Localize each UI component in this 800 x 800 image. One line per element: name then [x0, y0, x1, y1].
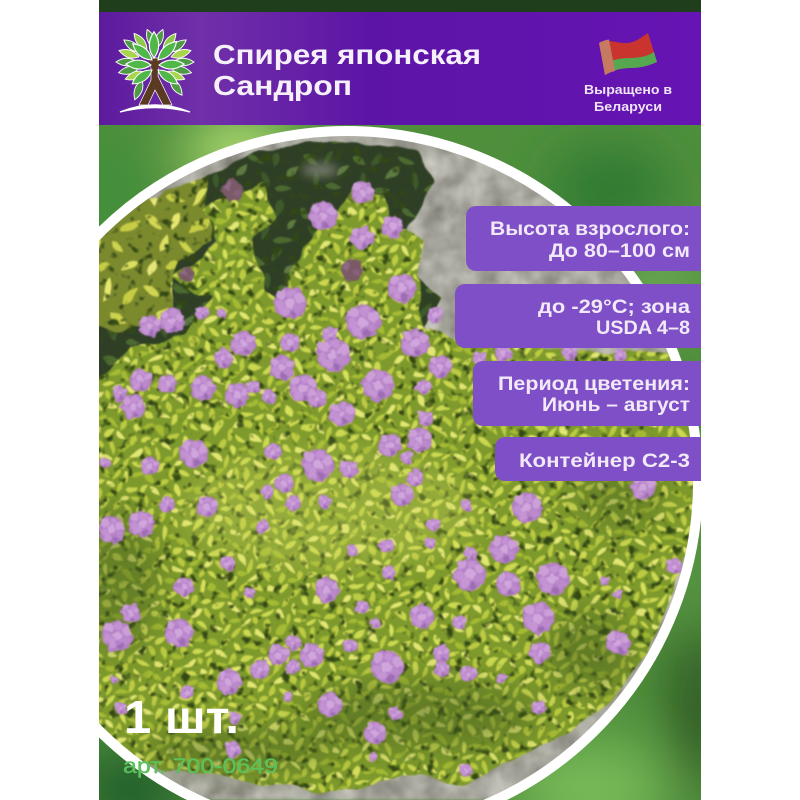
title: [213, 39, 481, 101]
white circle outline: [99, 126, 701, 800]
badge: flowering period: [473, 361, 718, 426]
blurred green background: [99, 125, 701, 800]
grown in Belarus label: [584, 85, 672, 114]
badge: container: [495, 437, 720, 481]
header banner: [99, 12, 701, 125]
upright flowering stems: [172, 181, 425, 346]
badge: container: Контейнер С2-3: [519, 451, 690, 472]
pink flower clusters: [99, 179, 684, 777]
quantity: 1 шт.: [124, 691, 239, 743]
gravel showing through foliage: [212, 158, 340, 286]
badge: flowering period: Период цветения:: [498, 374, 690, 395]
icon: Belarus flag: [599, 33, 657, 75]
badge: height: До 80–100 см: [549, 241, 690, 262]
badge: frost hardiness: до -29°C; зона: [538, 297, 690, 318]
gravel ground: [142, 136, 690, 800]
badge: flowering period: Июнь – август: [542, 395, 690, 416]
main shrub foliage: [99, 325, 693, 794]
badge: height: Высота взрослого:: [490, 219, 690, 240]
badge: height: [466, 206, 716, 271]
top dark strip: [99, 0, 701, 12]
title: Сандроп: [213, 70, 352, 101]
badge: frost hardiness: USDA 4–8: [596, 318, 690, 339]
foliage light and shadow: [80, 450, 665, 772]
product card: [99, 0, 701, 800]
title: Спирея японская: [213, 39, 481, 70]
badge: frost hardiness: [455, 284, 715, 348]
yellow bush on the left: [99, 178, 214, 334]
logo: tree: [116, 28, 194, 112]
grown in Belarus label: Беларуси: [594, 99, 662, 114]
dark background foliage: [99, 140, 442, 378]
article number: арт. 700-0649: [123, 755, 278, 778]
photo: spirea shrub in circle: [99, 136, 693, 800]
grown in Belarus label: Выращено в: [584, 82, 672, 97]
